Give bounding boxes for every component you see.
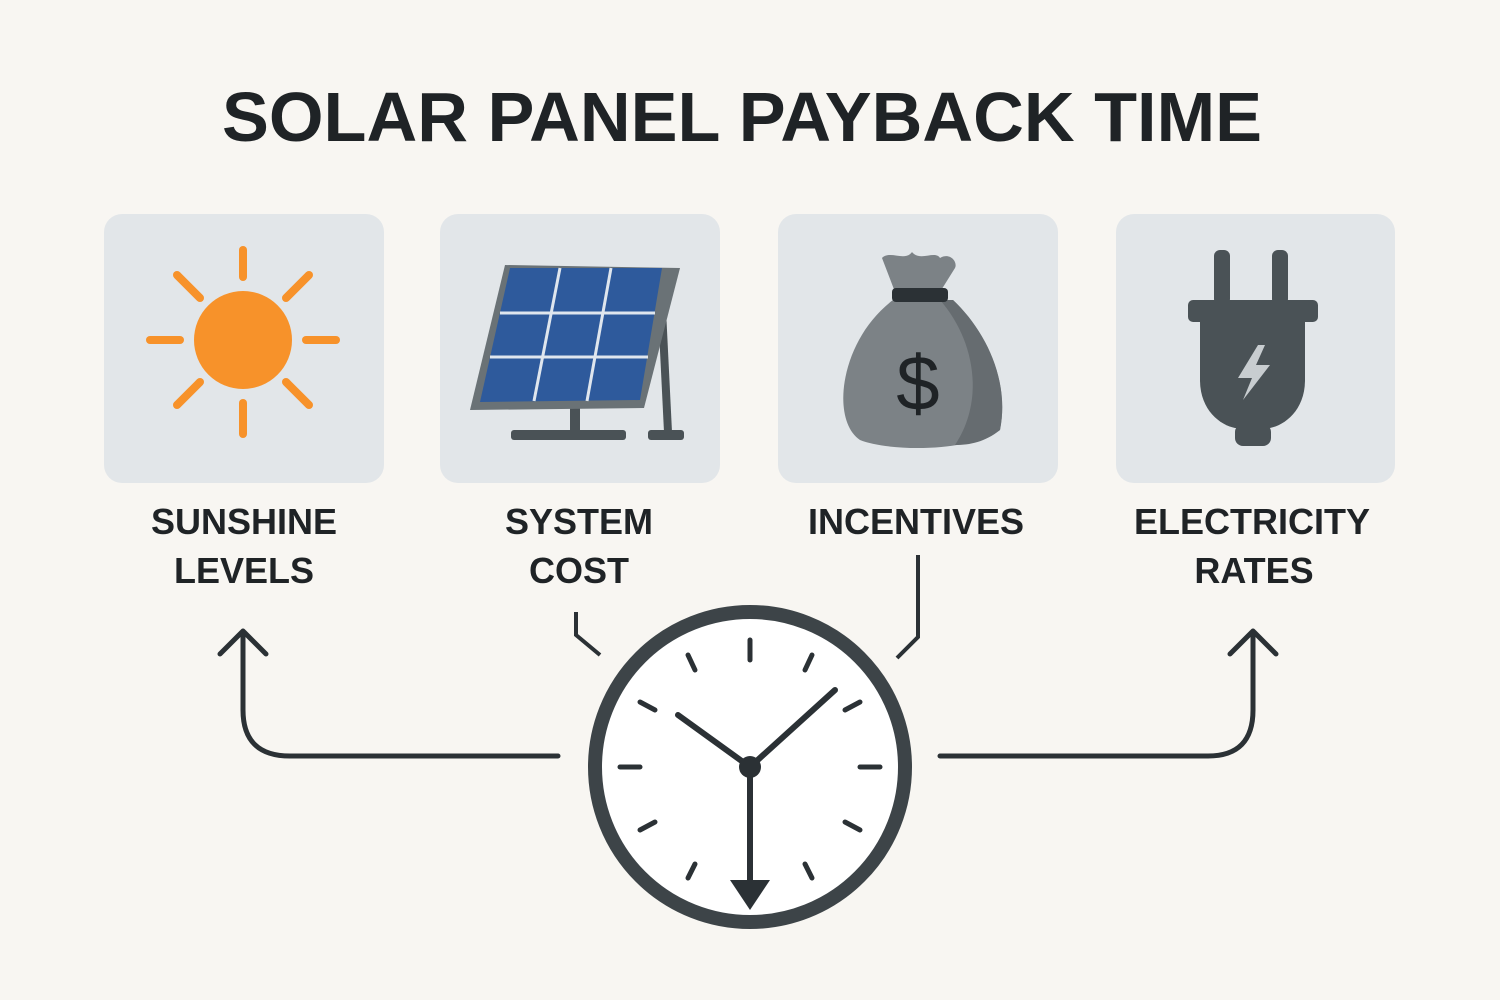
panel: electricity rates xyxy=(1116,214,1395,483)
icon: solar panel xyxy=(470,265,684,440)
label: sunshine levels: LEVELS xyxy=(174,550,314,591)
icon: money bag: $ xyxy=(896,339,940,427)
panel: system cost xyxy=(440,214,720,483)
label: electricity rates: RATES xyxy=(1194,550,1314,591)
label: system cost: COST xyxy=(529,550,629,591)
arrow: right xyxy=(940,631,1276,756)
connector: incentives xyxy=(897,555,918,658)
panel: sunshine xyxy=(104,214,384,483)
icon: money bag xyxy=(843,252,1002,448)
clock xyxy=(595,612,905,922)
clock hands xyxy=(678,690,835,885)
label: electricity rates: ELECTRICITY xyxy=(1134,501,1370,542)
label: incentives: INCENTIVES xyxy=(808,501,1024,542)
label: system cost: SYSTEM xyxy=(505,501,653,542)
icon: plug xyxy=(1188,250,1318,446)
arrow: left xyxy=(220,631,558,756)
title: SOLAR PANEL PAYBACK TIME xyxy=(222,78,1262,156)
icon: sun xyxy=(150,250,336,434)
connector: system cost xyxy=(576,612,600,655)
panel: incentives xyxy=(778,214,1058,483)
label: sunshine levels: SUNSHINE xyxy=(151,501,337,542)
